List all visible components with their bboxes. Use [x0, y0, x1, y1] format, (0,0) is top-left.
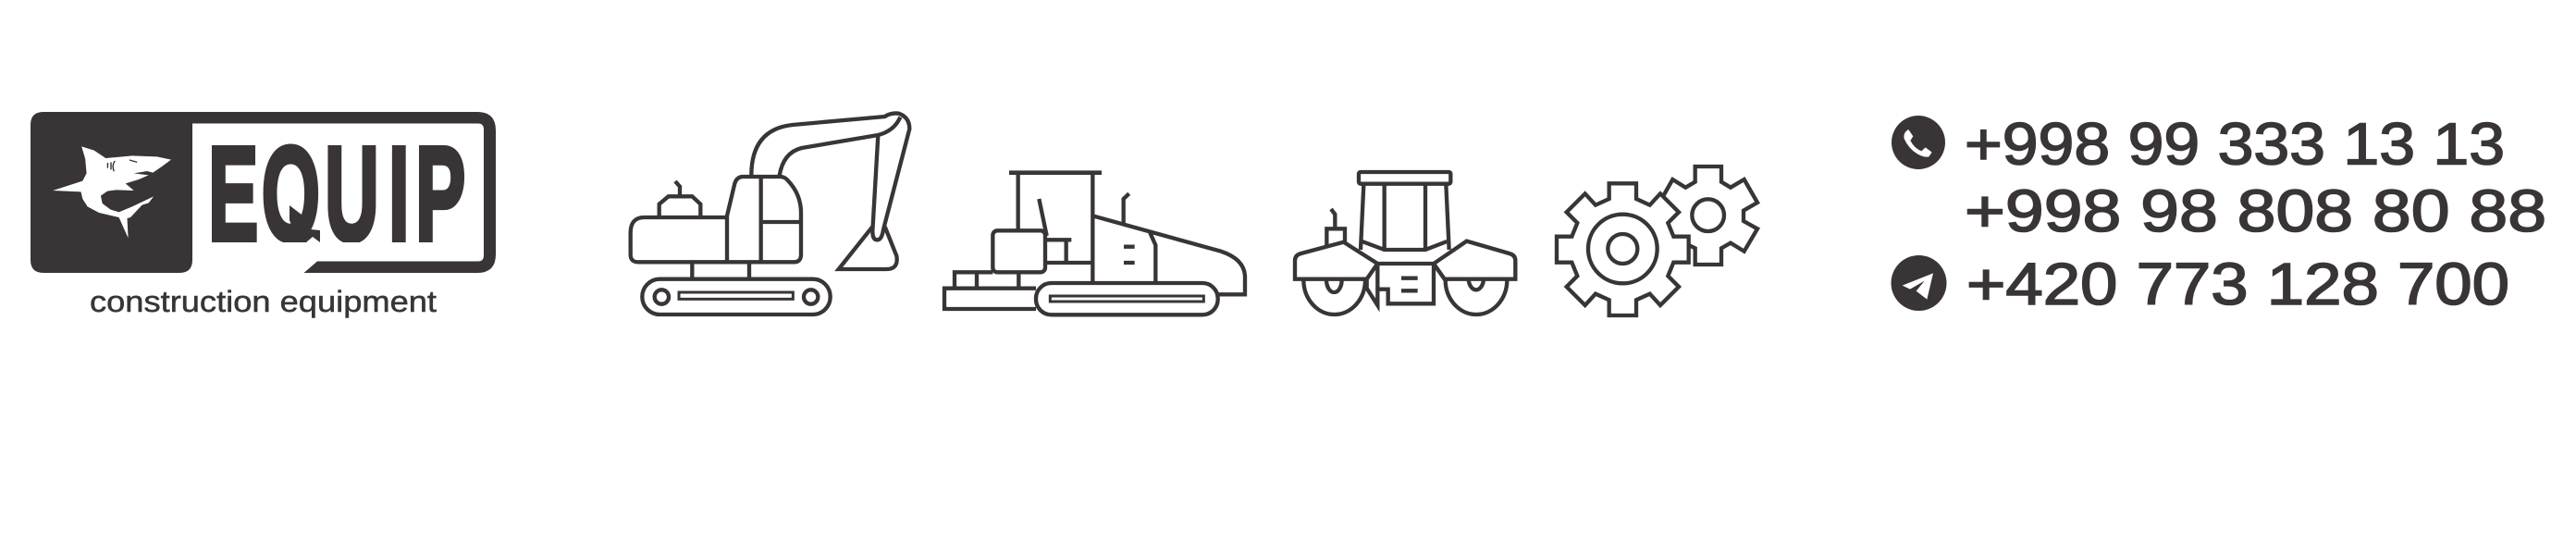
tagline: construction equipment [90, 285, 437, 318]
logo: EQUIP construction equipment [31, 112, 496, 318]
icon: paver [944, 173, 1245, 314]
phone number 3: +420 773 128 700 [1966, 251, 2509, 317]
wordmark: EQUIP [208, 119, 465, 268]
icon: telegram [1891, 255, 1946, 311]
icon: excavator [631, 113, 909, 314]
icon: shark [53, 146, 171, 238]
icon: road roller [1295, 172, 1515, 314]
wordmark Q tail accent [290, 205, 320, 242]
logo frame and dark panel [31, 112, 496, 273]
contacts [1891, 111, 2546, 317]
phone number 1: +998 99 333 13 13 [1965, 111, 2505, 178]
phone number 2: +998 98 808 80 88 [1965, 178, 2546, 244]
icon: gears [1557, 166, 1757, 315]
icon: phone [1892, 116, 1945, 169]
